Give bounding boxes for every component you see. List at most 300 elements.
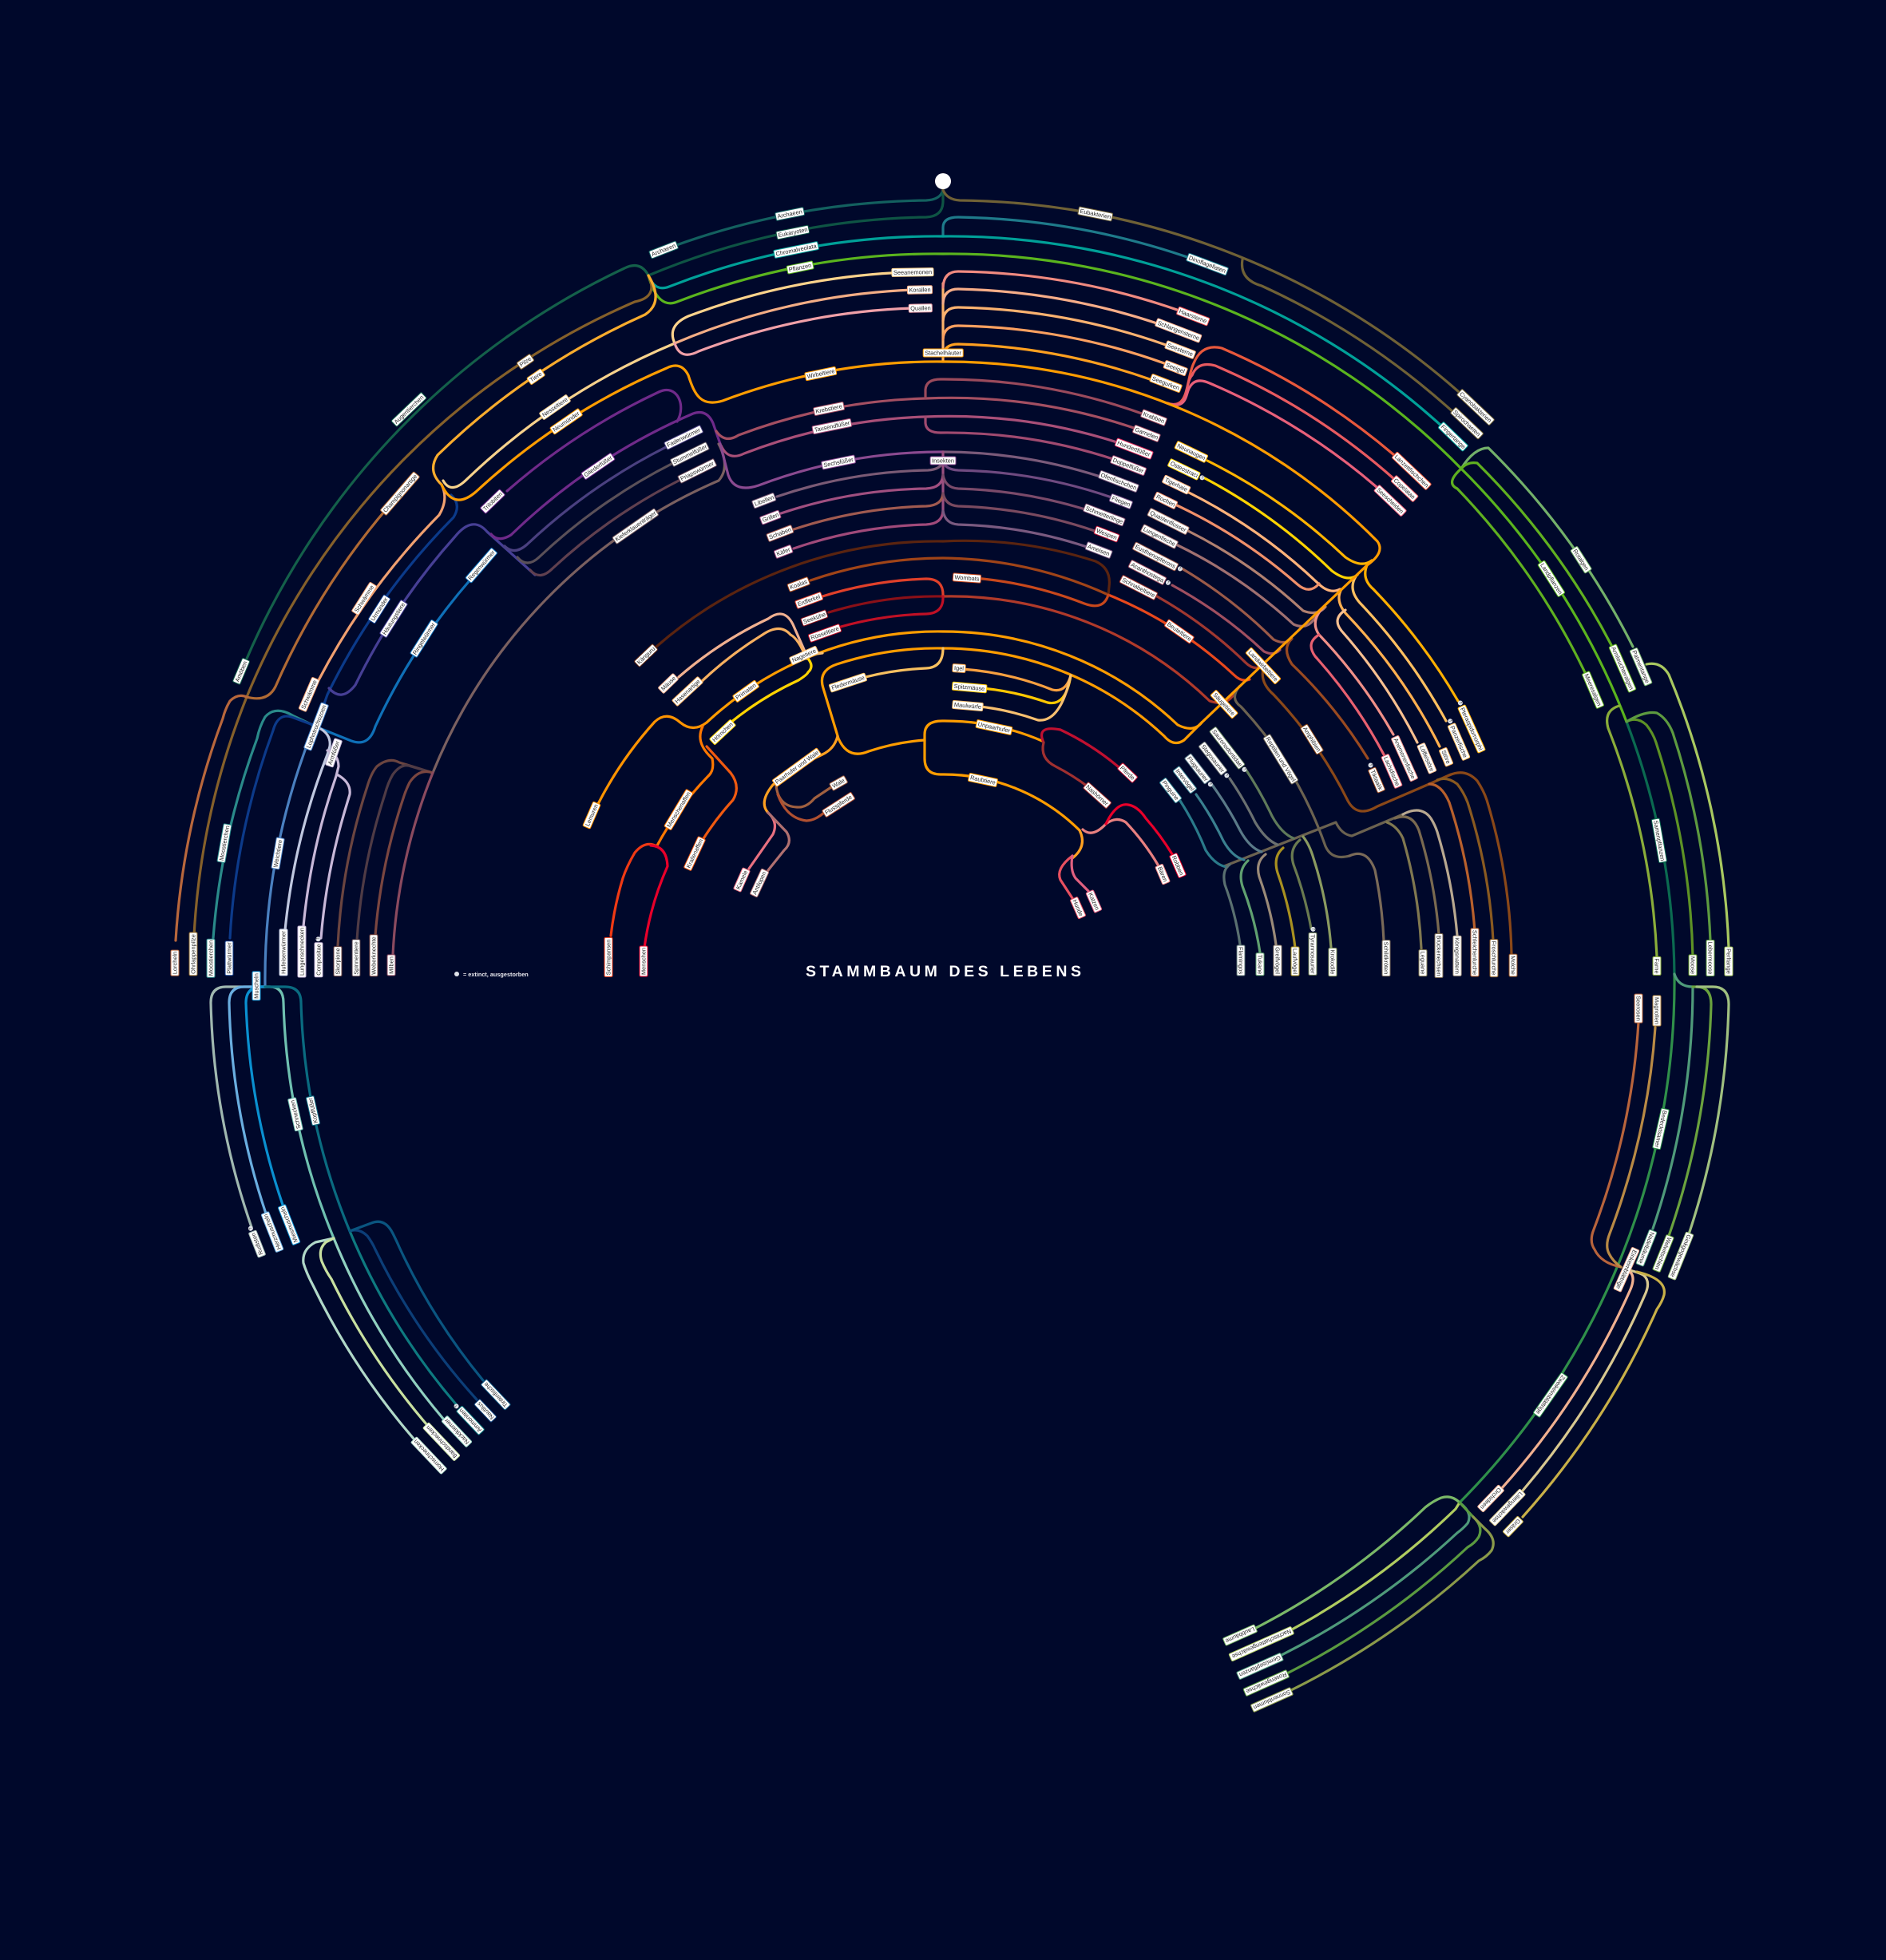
label: Farne: Farne xyxy=(1654,958,1661,974)
branch: Nacktkiemer xyxy=(334,1238,443,1419)
label: Eubakterien: Eubakterien xyxy=(1080,207,1111,220)
branch: Bandschnecken xyxy=(320,1238,427,1425)
branch: Spitzmäuse xyxy=(973,675,1071,703)
branch: Froschlurche xyxy=(1437,778,1493,940)
branch: Igel xyxy=(962,669,1071,691)
label: Perltange: Perltange xyxy=(1726,948,1733,974)
branch: Flamingos xyxy=(1224,865,1240,944)
label: Fledermäuse: Fledermäuse xyxy=(830,673,866,691)
label: Ringelwürmer: Ringelwürmer xyxy=(411,621,437,655)
label: Champignonartige: Champignonartige xyxy=(381,473,418,513)
branch: Kieferklauenträger xyxy=(433,444,725,773)
label: Tyrannosaurier: Tyrannosaurier xyxy=(1310,934,1317,974)
branch: Orchideen xyxy=(1501,1269,1633,1489)
label: Schlangensterne: Schlangensterne xyxy=(1157,319,1201,342)
branch: Pflanzen xyxy=(648,254,1461,469)
label: Doppelfüßer: Doppelfüßer xyxy=(1112,456,1145,474)
label: Amphibien: Amphibien xyxy=(1302,726,1322,753)
label: Primaten: Primaten xyxy=(734,681,757,701)
branch: Eukaryoten xyxy=(648,190,943,275)
branch: Magnolien xyxy=(1607,1028,1655,1267)
label: Welwitschien: Welwitschien xyxy=(1654,1237,1674,1271)
label: Rochen: Rochen xyxy=(1155,493,1177,508)
label: Mäuse xyxy=(657,673,680,694)
branch: Hunde xyxy=(1060,856,1072,898)
branch: Libellen xyxy=(777,461,943,497)
label: Nadelbäume: Nadelbäume xyxy=(1638,1231,1656,1265)
branch: Schimpansen xyxy=(611,844,657,936)
label: Robben: Robben xyxy=(1171,854,1186,876)
branch: Paarhufer und Wale xyxy=(764,736,838,813)
branch: Kopffüßer xyxy=(265,987,350,1231)
label: Hundertfüßer: Hundertfüßer xyxy=(1116,439,1151,458)
branch: Copelatae xyxy=(1167,364,1394,479)
branch: Krallenaffen xyxy=(695,746,736,853)
label: Panzerfische: Panzerfische xyxy=(1449,724,1469,758)
branch: Raubtier-Ast xyxy=(1072,830,1082,858)
branch: Kamele xyxy=(749,813,775,869)
label: Hunde: Hunde xyxy=(1072,898,1085,917)
label: Flusspferde: Flusspferde xyxy=(823,793,853,816)
branch: Unpaarhufer xyxy=(925,721,1042,741)
label: Quastenflosser: Quastenflosser xyxy=(1149,509,1187,533)
branch: Perltange xyxy=(1646,663,1729,948)
branch: Moose xyxy=(1626,719,1693,956)
infographic canvas: † xyxy=(316,937,321,940)
label: Sauronodontidae: † xyxy=(1242,767,1247,772)
branch: Seegurken xyxy=(943,344,1150,379)
branch: Seerosen xyxy=(1591,1022,1638,1267)
label: Nesseltiere: Nesseltiere xyxy=(541,395,569,418)
branch: Haarsterne xyxy=(943,271,1177,310)
branch: Farne xyxy=(1607,706,1657,956)
branch: Maulwürfe xyxy=(973,675,1071,720)
branch: Nashörner xyxy=(1043,742,1088,786)
branch: Schnecken xyxy=(265,987,334,1238)
branch: Champignonartige xyxy=(247,493,400,699)
branch: Miesmuscheln xyxy=(246,987,283,1205)
branch: Reptilien und Vögel xyxy=(1234,687,1349,857)
infographic canvas: † xyxy=(1448,719,1453,723)
branch: Meeresalgen xyxy=(1452,469,1593,690)
label: Nautilus: Nautilus xyxy=(475,1401,495,1421)
label: Rudisten: Rudisten xyxy=(249,1232,264,1256)
branch: Fledermäuse xyxy=(866,648,943,677)
branch: Landpflanzen xyxy=(1461,469,1626,722)
branch: Leguane xyxy=(1387,822,1421,948)
branch: Ginkgogewächse xyxy=(1689,987,1729,1234)
label: Lanzettfischchen: Lanzettfischchen xyxy=(1393,453,1431,489)
label: Nachtschattengewächse: Nachtschattengewächse xyxy=(1231,1628,1293,1661)
branch: Stummelfüßer xyxy=(517,463,673,563)
branch: Seesterne xyxy=(943,307,1166,345)
branch: Panzerfische xyxy=(1353,576,1446,721)
branch: Osteostraci xyxy=(1203,477,1357,578)
label: Flugsaurier: Flugsaurier xyxy=(1186,754,1210,782)
label: Moostierchen end: Moostierchen xyxy=(207,940,214,976)
branch: Amöben xyxy=(247,266,648,659)
branch: Weichtiere xyxy=(265,727,316,987)
branch: Laubbäume xyxy=(1256,1497,1460,1628)
branch: Sauropsiden-Stamm xyxy=(1224,814,1403,866)
branch: Greifvögel xyxy=(1258,854,1276,944)
branch: Bären xyxy=(1083,819,1158,865)
branch: Sauronodontidae xyxy=(1245,768,1294,838)
branch: Ofenfischchen xyxy=(943,452,1100,477)
label: Einkeimblättrige: Einkeimblättrige xyxy=(1615,1249,1638,1290)
branch: Tukane xyxy=(1241,861,1260,952)
branch: Plazentatiere xyxy=(943,596,1234,703)
label: Krallenaffen: Krallenaffen xyxy=(684,837,704,869)
label: Lemuren: Lemuren xyxy=(584,803,599,827)
label: Armfüßer: Armfüßer xyxy=(326,740,341,766)
branch: Krebstiere xyxy=(716,398,1134,438)
branch: Beuteltiere xyxy=(1108,595,1250,680)
label: Kopffüßer: Kopffüßer xyxy=(307,1097,319,1124)
label: Milben xyxy=(386,955,396,976)
label: Schildkröten: Schildkröten xyxy=(1383,942,1390,974)
label: Lophotrochozoen: Lophotrochozoen xyxy=(304,704,327,749)
label: Käfer xyxy=(773,544,794,559)
label: Krokodile: Krokodile xyxy=(1329,950,1337,974)
infographic canvas: † xyxy=(248,1226,253,1230)
branch: Lemuren xyxy=(598,716,707,804)
label: Froschlurche: Froschlurche xyxy=(1491,941,1498,975)
branch: Acanthostega xyxy=(1172,585,1280,654)
label: Seeigel: Seeigel xyxy=(1165,361,1186,374)
branch: Tyrannosaurier xyxy=(1292,840,1311,929)
branch: Lungenschnecken xyxy=(303,750,339,926)
label: Katzen xyxy=(1085,889,1103,913)
branch: Koalas xyxy=(810,558,1108,595)
branch: Nadelbäume xyxy=(1653,974,1693,1229)
branch: Nautilus xyxy=(350,1230,477,1400)
branch: Flusspferde xyxy=(778,794,824,821)
label: Molche xyxy=(1509,954,1517,976)
label: Menschen: Menschen xyxy=(640,948,647,975)
label: Tiere: Tiere xyxy=(528,370,543,383)
label: Libellen: Libellen xyxy=(753,493,775,507)
branch: Gräser xyxy=(1523,1272,1664,1517)
label: Tiktaalik xyxy=(1368,766,1385,794)
label: Tiktaalik: Tiktaalik xyxy=(1369,769,1385,791)
branch: Katzen xyxy=(1072,856,1088,891)
label: Pflanzen: Pflanzen xyxy=(788,261,812,273)
label: Archaeen end: Archaeen xyxy=(650,242,676,257)
branch: Gemüsepflanzen xyxy=(1282,1503,1469,1655)
label: Landwirbeltiere: Landwirbeltiere xyxy=(1247,648,1280,683)
branch: Quallen xyxy=(675,308,914,354)
branch: Nachtschattengewächse xyxy=(1292,1503,1460,1629)
branch: Intervögel xyxy=(1196,794,1244,860)
branch: Rudisten xyxy=(211,987,265,1227)
label: Seekühe: Seekühe xyxy=(802,610,826,625)
branch: Schlangensterne xyxy=(943,289,1157,323)
branch: Nagetiere xyxy=(804,653,822,655)
branch: Chromalveolata xyxy=(648,236,1453,437)
branch: Insekten xyxy=(941,452,945,514)
label: Störe xyxy=(1439,746,1453,767)
branch: Rochen xyxy=(1177,505,1319,589)
label: Seegurken: Seegurken xyxy=(1151,374,1180,391)
label: Laufvögel: Laufvögel xyxy=(1292,948,1299,974)
label: Sechsfüßer: Sechsfüßer xyxy=(822,455,854,469)
label: Ameisen: Ameisen xyxy=(1087,542,1111,557)
branch: Menschen xyxy=(644,845,668,948)
branch: Seescheiden xyxy=(1167,381,1377,487)
label: Pilze: Pilze xyxy=(518,354,533,368)
branch: Mäuse xyxy=(679,614,808,677)
label: Liliengewächse: Liliengewächse xyxy=(1492,1491,1524,1525)
branch: Stachelhäuter xyxy=(941,283,945,362)
label: Zweikeimblättrige: Zweikeimblättrige xyxy=(1535,1374,1567,1416)
label: Tintenfische: Tintenfische xyxy=(482,1381,509,1409)
label: Käfer: Käfer xyxy=(775,545,791,557)
branch: Tintenfische xyxy=(350,1222,483,1380)
label: Häutungstiere: Häutungstiere xyxy=(380,601,406,636)
branch: Schleichenlurche xyxy=(1429,784,1475,932)
branch: Lebermoose xyxy=(1626,712,1710,940)
branch: Löffelstöre xyxy=(1337,610,1417,742)
label: Ofenfischchen: Ofenfischchen xyxy=(1100,471,1138,491)
label: Dinoflagellaten: Dinoflagellaten xyxy=(1188,254,1227,274)
label: Kieferklauenträger: Kieferklauenträger xyxy=(613,509,657,543)
label: Meeresalgen: Meeresalgen xyxy=(1583,672,1603,707)
branch: Samenpflanzen xyxy=(1626,722,1674,976)
label: Tiere xyxy=(526,368,545,386)
label: Quallen xyxy=(909,303,933,313)
root node xyxy=(935,173,951,189)
branch: Stegosaurier xyxy=(1230,778,1278,845)
label: Känguru: Känguru xyxy=(635,645,656,666)
label: Leguane xyxy=(1418,949,1428,976)
branch: Moostierchen xyxy=(213,711,319,938)
branch: Amphibien xyxy=(1262,669,1451,811)
label: Wombats: Wombats xyxy=(954,573,980,582)
branch: Lungenfische xyxy=(1178,545,1316,626)
label: Lungenschnecken: Lungenschnecken xyxy=(298,928,305,976)
branch: Urmünder xyxy=(316,495,457,727)
label: Stachelhäuter: Stachelhäuter xyxy=(925,349,961,356)
label: Erdferkel: Erdferkel xyxy=(796,592,821,608)
branch: Spinnentiere xyxy=(357,766,433,940)
label: Nagetiere: Nagetiere xyxy=(790,647,817,663)
branch: Fliegen xyxy=(943,461,1111,497)
branch: Antilopen xyxy=(768,813,789,870)
branch: Tausendfüßer xyxy=(721,416,1122,456)
label: Orchideen: Orchideen xyxy=(1479,1487,1503,1511)
branch: Wale xyxy=(776,786,831,807)
label: Säugetiere: Säugetiere xyxy=(1212,691,1237,717)
label: Muscheln: Muscheln xyxy=(252,973,260,999)
infographic canvas: † xyxy=(1166,580,1171,585)
label: Paarhufer und Wale: Paarhufer und Wale xyxy=(774,749,820,785)
branch: Lachsfische xyxy=(1311,635,1384,754)
label: Hasenartige: Hasenartige xyxy=(673,678,701,704)
label: Wespen: Wespen xyxy=(1096,526,1118,541)
label: Spitzmäuse: Spitzmäuse xyxy=(953,682,985,692)
title: STAMMBAUM DES LEBENS xyxy=(806,963,1085,980)
branch: Tiktaalik xyxy=(1287,639,1368,758)
label: Lebermoose: Lebermoose xyxy=(1707,941,1714,975)
branch: Tigerhaie xyxy=(1189,493,1340,591)
label: Ammoniten: Ammoniten xyxy=(458,1408,483,1434)
branch: Sonnenblumen xyxy=(1291,1517,1493,1690)
branch: Seeanemonen xyxy=(672,272,906,343)
label: Katzen: Katzen xyxy=(1088,891,1101,911)
label: Gräser: Gräser xyxy=(1504,1518,1522,1536)
label: Trilobiten: Trilobiten xyxy=(481,490,504,512)
label: Compositae: Compositae xyxy=(315,944,322,976)
branch: Flugsaurier xyxy=(1212,785,1262,852)
label: Lorcheln: Lorcheln xyxy=(171,952,178,974)
label: Beuteltiere: Beuteltiere xyxy=(1166,620,1193,642)
label: Pferde xyxy=(1116,762,1139,783)
branch: Lorcheln xyxy=(176,695,247,940)
label: Brückenechsen: Brückenechsen xyxy=(1436,936,1443,976)
branch: Regenwürmer xyxy=(319,579,471,742)
label: Leguane: Leguane xyxy=(1420,952,1427,974)
label: Nacktkiemer: Nacktkiemer xyxy=(442,1417,470,1446)
label: Spinnentiere: Spinnentiere xyxy=(352,941,359,975)
label: Greifvögel: Greifvögel xyxy=(1274,947,1282,974)
branch: Anemonenfische xyxy=(1315,607,1393,735)
label: Gliederfüßer: Gliederfüßer xyxy=(582,453,613,478)
infographic canvas: † xyxy=(1311,928,1316,930)
label: Lorcheln xyxy=(171,949,179,976)
branch: Häutungstiere xyxy=(329,525,535,695)
label: Raubtiere: Raubtiere xyxy=(969,774,996,786)
label: Weberknechte: Weberknechte xyxy=(370,936,377,975)
branch: Schildkröten xyxy=(1349,853,1384,940)
label: Schnecken: Schnecken xyxy=(288,1099,302,1130)
branch: Hörnchen xyxy=(731,659,811,723)
label: Miesmuscheln: Miesmuscheln xyxy=(279,1206,299,1244)
label: Tigerhaie: Tigerhaie xyxy=(1164,476,1189,493)
label: Chromalveolata: Chromalveolata xyxy=(775,242,817,257)
label: Fliegen xyxy=(1108,493,1134,509)
label: Stummelfüßer: Stummelfüßer xyxy=(672,442,708,465)
label: Schwämme end: Schwämme xyxy=(299,679,318,710)
label: Rotalgen: Rotalgen xyxy=(1572,548,1591,572)
label: Flugsaurier: † xyxy=(1208,782,1213,786)
label: Garnelen: Garnelen xyxy=(1134,426,1159,441)
label: Ginkgogewächse: Ginkgogewächse xyxy=(1670,1233,1693,1278)
label: Plattwürmer: Plattwürmer xyxy=(225,942,232,974)
label: Flamingos: Flamingos xyxy=(1238,947,1245,974)
branch: Lanzettfischchen xyxy=(1167,347,1394,455)
branch: Laufvögel xyxy=(1276,848,1295,948)
label: Lachsfische: Lachsfische xyxy=(1382,755,1401,786)
branch: Ameisen xyxy=(943,511,1087,547)
branch: Grillen xyxy=(781,475,943,513)
branch: Rosengewächse xyxy=(1287,1503,1480,1673)
label: Rüsseltiere: Rüsseltiere xyxy=(810,624,840,641)
branch: Königsnattern xyxy=(1403,810,1457,936)
branch: Liliengewächse xyxy=(1523,1269,1648,1491)
label: Pinguine: Pinguine xyxy=(1161,779,1181,802)
label: Intervögel: Intervögel xyxy=(1175,767,1196,792)
label: Moose: Moose xyxy=(1690,956,1697,974)
branch: Compositae xyxy=(321,774,350,938)
label: Störe: Störe xyxy=(1440,749,1452,765)
label: Schimpansen: Schimpansen xyxy=(604,940,612,975)
branch: Hornschnecken xyxy=(303,1238,414,1439)
label: Lungenfische: Lungenfische xyxy=(1143,525,1177,548)
branch: Pinguine xyxy=(1180,801,1227,867)
label: Reptilien und Vögel: Reptilien und Vögel xyxy=(1265,735,1298,782)
branch: Neunaugen xyxy=(1207,461,1372,564)
label: Rochen xyxy=(1153,491,1179,510)
label: Fliegen: Fliegen xyxy=(1111,494,1131,508)
label: Wespen xyxy=(1093,525,1120,543)
label: Eusthenopterons: Eusthenopterons xyxy=(1134,543,1177,569)
branch: Molche xyxy=(1449,773,1512,954)
branch: Milben xyxy=(393,773,433,955)
branch: Seekühe xyxy=(829,596,943,612)
branch: Trilobiten xyxy=(507,390,681,491)
branch: Neumünder und Wirbeltiere xyxy=(442,362,1380,723)
label: Insekten xyxy=(930,457,956,465)
label: Hörnchen: Hörnchen xyxy=(711,720,734,743)
label: Sauronodontidae: Sauronodontidae xyxy=(1211,728,1244,768)
label: Ammoniten: † xyxy=(454,1404,458,1408)
label: Schmetterlinge: Schmetterlinge xyxy=(1085,504,1124,525)
infographic canvas: † xyxy=(1178,566,1182,572)
label: Grillen: Grillen xyxy=(761,511,779,524)
label: Acanthostega: Acanthostega xyxy=(1130,560,1165,584)
label: Schwämme: Schwämme xyxy=(352,584,375,613)
infographic canvas: † xyxy=(1458,701,1463,705)
label: Antilopen: Antilopen xyxy=(751,870,767,896)
branch: Armleuchteralgen xyxy=(1461,463,1611,645)
branch: Schnabeltiere xyxy=(1157,596,1266,668)
label: Insekten: Insekten xyxy=(932,457,954,464)
label: Hornschnecken: Hornschnecken xyxy=(412,1439,446,1473)
label: Herzmuscheln: Herzmuscheln xyxy=(262,1214,282,1251)
label: Amöben: Amöben xyxy=(233,659,248,683)
label: Libellen xyxy=(751,492,777,509)
label: Krabben: Krabben xyxy=(1143,410,1166,425)
label: Nashörner: Nashörner xyxy=(1084,783,1110,806)
label: Robben xyxy=(1169,853,1187,878)
branch: Raubtiere xyxy=(925,741,1080,830)
branch: Rüsseltiere xyxy=(841,596,943,627)
branch: Schmetterlinge xyxy=(943,475,1085,509)
branch: Fadenwürmer xyxy=(505,447,666,551)
branch: Pilze xyxy=(194,275,652,936)
label: Tukane: Tukane xyxy=(1257,955,1264,974)
label: Schaben: Schaben xyxy=(768,525,792,540)
label: Pferde: Pferde xyxy=(1119,764,1136,781)
label: Igel: Igel xyxy=(954,664,964,671)
label: Archaeen: Archaeen xyxy=(777,208,802,220)
label: Tausendfüßer: Tausendfüßer xyxy=(814,419,850,433)
label: Haarsterne: Haarsterne xyxy=(1178,307,1208,324)
label: Stegosaurier: Stegosaurier xyxy=(1200,742,1226,774)
branch: Quastenflosser xyxy=(1188,531,1325,613)
label: Spirochaeten: Spirochaeten xyxy=(1452,408,1482,438)
label: Moose xyxy=(1688,954,1698,976)
label: Bären: Bären xyxy=(1156,865,1169,883)
branch: Archaeen xyxy=(664,190,943,250)
branch: Wespen xyxy=(943,493,1095,531)
label: Stegosaurier: † xyxy=(1224,773,1230,778)
branch: Krokodile xyxy=(1303,837,1331,948)
label: Unpaarhufer: Unpaarhufer xyxy=(977,720,1011,734)
branch: Ammoniten xyxy=(350,1231,457,1405)
label: Nautilus xyxy=(473,1399,497,1423)
